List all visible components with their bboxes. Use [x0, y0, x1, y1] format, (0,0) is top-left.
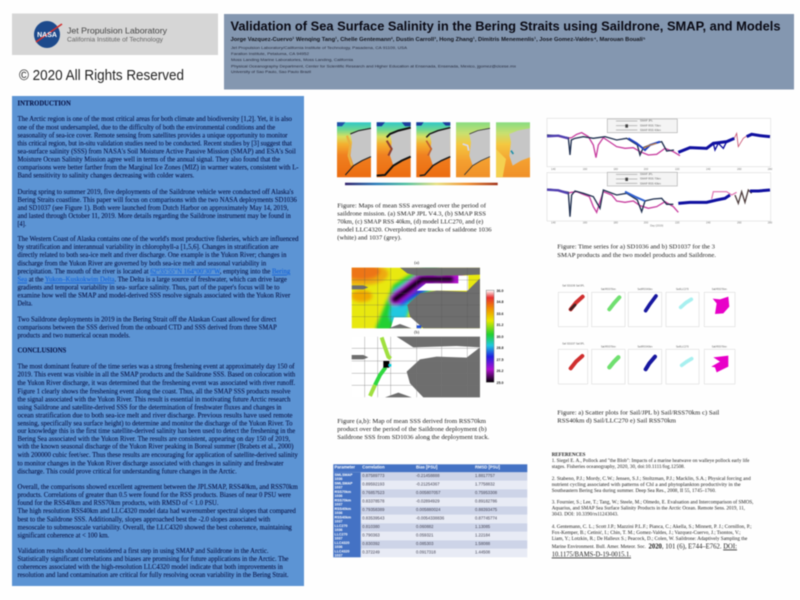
table header row: Parameter: [334, 464, 355, 470]
table values: 0.89592193: [362, 482, 385, 486]
table values: 0.87745774: [475, 516, 498, 520]
paragraph: validation results: coherences associated with the high-resolution LLC4320 model indicate that both improvements in: [18, 562, 283, 571]
panel titles: Sail/RSS70km: [712, 289, 727, 291]
Caltech line: California Institute of Technology: [67, 36, 164, 44]
legend box: SMAP RSS 70km: [640, 177, 662, 181]
paragraph: western coast: precipitation. The mouth of the river is located at 62°35′55″N 164°00′30″W, emptying into the Bering: [18, 267, 290, 276]
paragraph: Arctic region: seasonality of sea-ice cover. Remote sensing from satellites provides a unique opportunity to monitor: [18, 130, 288, 139]
x axis ticks: 260: [737, 221, 742, 225]
references: [552, 452, 754, 558]
paragraph: deployments: Bering Straits coastline. This paper will focus on comparisons with the two NASA deployments SD1036: [18, 195, 297, 204]
paragraph: freshening event: the signal associated with the Yukon River. This result is essential in motivating future Arctic research: [18, 394, 291, 403]
panel titles: Sail/RSS40km: [637, 347, 653, 349]
x axis ticks: 160: [583, 167, 588, 171]
label (a): (a): [414, 260, 420, 265]
table first column: 1036: [334, 494, 342, 498]
map c: SMAP RSS 40km: [416, 122, 450, 177]
legend: SSS colorbar: 31.2: [496, 323, 504, 327]
paragraph: freshening event: with 200000 cubic feet/sec. Thus these results are encouraging for application of satellite-derived salinity: [18, 450, 298, 459]
paragraph: deployments: During spring to summer 2019, five deployments of the Saildrone vehicle were conducted off Alaska's: [18, 187, 294, 196]
table first column: RSS40km: [334, 507, 351, 511]
reference 4: 2020, 101 (6), E744–E762. DOI:: [648, 542, 737, 550]
paragraph: Arctic region: [18, 114, 299, 180]
legend: SSS colorbar: 36.0: [496, 289, 504, 293]
x axis ticks: 220: [675, 167, 680, 171]
table values: -0.21254367: [416, 482, 440, 486]
heading: introduction: INTRODUCTION: [18, 98, 71, 107]
table values: 1.22184: [475, 532, 491, 538]
map e: LLC4320: [496, 122, 530, 177]
x axis ticks: [551, 221, 773, 228]
paragraph: deployments: and lasted through October 11, 2019. More details regarding the Saildrone instrument may be found in: [18, 211, 291, 220]
legend box: SMAP RSS 40km: [640, 181, 662, 185]
legend: SSS colorbar: [486, 289, 504, 385]
legend: SSS colorbar: 30.0: [496, 335, 504, 339]
map a: SMAP JPL: [337, 122, 371, 177]
x axis ticks: 240: [706, 221, 711, 225]
caption: RSS70km map: product over the period of the Saildrone deployment (b): [337, 426, 487, 433]
paragraph: direct comparisons: [18, 314, 277, 339]
chart: Saildrone track map (b): [352, 329, 480, 397]
paragraph: freshening event: using Saildrone and satellite-derived SSS for the determination of freshwater fluxes and changes in: [18, 402, 282, 411]
paragraph: western coast: gradients and temporal variability in sea- surface salinity. Thus, part of the paper's focus will be to: [18, 282, 280, 291]
x axis ticks: 180: [613, 167, 618, 171]
caption: RSS70km map: Figure (a,b): Map of mean SSS derived from RSS70km: [337, 418, 487, 425]
affiliations: Moss Landing Marine Laboratories, Moss Landing, California: [231, 58, 353, 62]
table values: 0.085303: [416, 541, 434, 546]
caption: maps of mean SSS: [337, 202, 492, 242]
table values: 0.75953308: [475, 490, 498, 495]
table first column: LLC4320: [334, 549, 349, 553]
affiliations: [231, 46, 516, 74]
paragraph: western coast: by stratification and interannual variability in chlorophyll-a [1,5,6]. Changes in stratification are: [18, 242, 279, 251]
chart: scatter plots row SD1037: [558, 344, 735, 384]
table values: 0.810380: [362, 524, 380, 529]
caption: RSS70km map: [337, 418, 490, 441]
table values: 0.87589773: [362, 473, 385, 478]
paragraph: western coast: discharge from the Yukon River are governed by both sea-ice melt and seasonal variability in: [18, 258, 266, 267]
reference 4: Liam, Y.; Lotzkin, R.; De Halleux S.; Peacock, D.; Colen, W. Saildrone: Adaptively Sampling the: [552, 536, 748, 542]
reference 2: nutrient cycling associated with patterns of Chl a and phytoplankton productivity in the: [552, 481, 741, 488]
caption: maps of mean SSS: saildrone mission. (a) SMAP JPL V4.3, (b) SMAP RSS: [337, 210, 486, 217]
x axis ticks: 200: [644, 167, 649, 171]
table first column: 1037: [334, 536, 342, 540]
reference 1: [552, 457, 750, 470]
table values: 0.372249: [362, 550, 380, 554]
reference 4: Fox-Kemper, B.; Cetinić, I.; Chin, T. M.; Gomez-Valdes, J.; Vazquez-Cuervo, J.; Tsontos, V.;: [552, 530, 741, 536]
legend: SSS colorbar: 33.6: [496, 312, 504, 316]
legend: SSS colorbar: 28.8: [496, 346, 504, 350]
reference 3: Aquarius, and SMAP Sea Surface Salinity Products in the Arctic Ocean. Remote Sens. 2019, 11,: [552, 505, 746, 512]
paragraph: freshening event: [18, 362, 298, 475]
references heading: REFERENCES: [552, 452, 585, 458]
table values: 1.44508: [475, 550, 491, 554]
paragraph: freshening event: Figure 1 clearly shows the freshening event along the coast. Thus, all the SMAP SSS products resolve: [18, 386, 291, 395]
panel titles: Sail/RSS70km: [601, 347, 616, 349]
JPL name: Jet Propulsion Laboratory: [67, 26, 168, 36]
caption: maps of mean SSS: 70km, (c) SMAP RSS 40km, (d) model LLC270, and (e): [337, 219, 483, 226]
panel titles: Sail/LLC270: [676, 289, 689, 291]
reference 4: 10.1175/BAMS-D-19-0015.1.: [552, 550, 631, 558]
paragraph: freshening event: the Yukon River discharge, it was determined that the freshening event was associated with river runoff.: [18, 378, 295, 387]
table header row: Correlation: [362, 464, 385, 470]
authors: Jorge Vazquez-Cuervo¹ Wenqing Tang¹, Chelle Gentemann², Dustin Carroll³, Hong Zhang¹, Dimitris Menemenlis¹, Jose Gomez-Valdes⁴, Marouan Bouali⁵: [230, 36, 646, 43]
x axis ticks: 180: [613, 221, 618, 225]
panel titles: [562, 344, 727, 349]
legend: SSS colorbar: 27.5: [496, 358, 504, 362]
chart: five SSS maps: [337, 122, 530, 185]
table values: 0.0917318: [416, 550, 436, 554]
x axis ticks: 220: [675, 221, 680, 225]
map d: LLC270: [456, 122, 490, 177]
table first column: 1036: [334, 511, 342, 515]
table first column: [334, 473, 353, 558]
chart: scatter plots row SD1036: [558, 286, 735, 327]
x axis ticks: [551, 167, 773, 171]
table values: 0.830392: [362, 541, 380, 546]
panel titles: Sail/RSS70km: [601, 289, 616, 291]
chart: RSS70km mean SSS map (a): [350, 260, 481, 330]
table first column: SMLSMAP: [334, 481, 353, 485]
icon: NASA meatball: NASA: [37, 32, 57, 39]
table first column: 1036: [334, 477, 342, 481]
table values: 0.76857523: [362, 490, 385, 495]
panel titles: Sail SD1037 Sail/JPL: [562, 344, 585, 346]
table first column: LLC270: [334, 524, 347, 528]
panel titles: [562, 286, 727, 291]
paragraph: direct comparisons: Two Saildrone deployments in 2019 in the Bering Strait off the Alaskan Coast allowed for direct: [18, 314, 277, 323]
paragraph: comparisons overall: Overall, the comparisons showed excellent agreement between the JPLSMAP, RSS40km, and RSS70km: [18, 482, 298, 491]
table first column: LLC270: [334, 532, 347, 536]
paragraph: Arctic region: comparisons were better farther from the Marginal Ice Zones (MIZ) in warmer waters, consistent with L-: [18, 163, 299, 172]
paragraph: freshening event: to monitor changes in the Yukon River discharge associated with changes in salinity and freshwater: [18, 458, 284, 467]
chart: time series SD1036: [547, 118, 773, 171]
caption: scatter plots: Figure: a) Scatter plots for Sail/JPL b) Sail/RSS70km c) Sail: [557, 410, 719, 417]
paragraph: freshening event: with the known seasonal discharge of the Yukon River peaking in Boreal summer (Brabets et al., 2000): [18, 442, 294, 451]
heading: conclusions: CONCLUSIONS: [18, 346, 66, 355]
x axis ticks: 260: [737, 167, 742, 171]
table values: 0.79358389: [362, 507, 385, 512]
panel titles: Sail/LLC270: [676, 347, 689, 349]
caption: maps of mean SSS: (white) and 1037 (grey).: [337, 235, 402, 242]
table first column: LLC4320: [334, 541, 349, 545]
legend box: SMAP JPL: [640, 172, 653, 176]
panel titles: Sail SD1036 Sail/JPL: [562, 286, 585, 288]
table values: 1.58088: [475, 541, 491, 546]
paragraph: comparisons overall: best to the Saildrone SSS. Additionally, slopes approached best the -2.0 slopes associated with: [18, 514, 270, 523]
reference 1: stages. Fisheries oceanography, 2020, 30, doi:10.1111/fog.12508.: [552, 463, 685, 470]
reference 2: 2. Stabeno, P.J.; Mordy, C.W.; Jensen, S.J.; Stoltzman, P.J.; Macklin, S.A.; Physical forcing and: [552, 475, 751, 482]
paragraph: comparisons overall: found for the RSS40km and RSS70km products, with RMSD of < 1.0 PSU.: [18, 498, 219, 507]
caption: scatter plots: [557, 410, 719, 425]
x axis ticks: 240: [706, 167, 711, 171]
table first column: 1036: [334, 528, 342, 532]
affiliations: University of Sao Paulo, Sao Paulo Brazil: [231, 70, 311, 74]
paragraph: Arctic region: Moisture Ocean Salinity Mission agree well in terms of the annual signal. They also found that the: [18, 155, 281, 164]
panel titles: Sail/RSS40km: [637, 289, 653, 291]
x axis ticks: 140: [551, 221, 556, 225]
table values: 0.88393475: [475, 507, 498, 512]
table values: 0.83539543: [362, 516, 385, 520]
paragraph: freshening event: Bering Sea associated with the Yukon River. The results are consistent, appearing on day 150 of 2019,: [18, 434, 290, 443]
reference 3: 3. Fournier, S.; Lee, T.; Tang, W.; Steele, M.; Olmedo, E. Evaluation and Intercomparison of SMOS,: [552, 499, 754, 506]
map b: SMAP RSS 70km: [377, 122, 411, 177]
paragraph: freshening event: The most dominant feature of the time series was a strong freshening event at approximately day 150 of: [18, 362, 295, 371]
paragraph: western coast: examine how well the SMAP and model-derived SSS resolve signals associated with the Yukon River: [18, 290, 291, 299]
paragraph: comparisons overall: [18, 482, 298, 540]
table values: 1.7758832: [475, 482, 495, 486]
table values: 0.005880024: [416, 507, 441, 512]
affiliations: Farallon Institute, Petaluma, CA 94952: [231, 52, 309, 56]
table values: 0.89182786: [475, 498, 498, 504]
caption: maps of mean SSS: Figure: Maps of mean SSS averaged over the period of: [337, 202, 487, 209]
JPL logo panel: [12, 14, 218, 55]
table first column: RSS70km: [334, 498, 351, 502]
table values: 0.060882: [416, 524, 434, 529]
legend box: [607, 172, 677, 186]
paragraph: Arctic region: sea-surface salinity (SSS) from NASA's Soil Moisture Active Passive Mission (SMAP) and ESA's Soil: [18, 146, 296, 155]
paragraph: direct comparisons: products and two numerical ocean models.: [18, 330, 130, 339]
caption: time series: Figure: Time series for a) SD1036 and b) SD1037 for the 3: [557, 244, 716, 251]
paragraph: comparisons overall: The high resolution RSS40km and LLC4320 model data had wavenumber spectral slopes that compared: [18, 506, 296, 515]
table header row: [334, 464, 500, 470]
x axis ticks: 200: [644, 221, 649, 225]
icon: NASA meatball: [34, 21, 62, 48]
paragraph: deployments: [4].: [18, 219, 26, 228]
table values: 0.790363: [362, 532, 380, 538]
table values: -0.21458888: [416, 473, 440, 478]
reference 3: [552, 499, 754, 518]
table header row: RMSD [PSU]: [475, 464, 500, 470]
table values: -0.0054338836: [416, 516, 445, 520]
table: statistics: [333, 464, 527, 558]
table first column: 1037: [334, 520, 342, 524]
table values: [362, 473, 498, 554]
map colorbar: [345, 183, 498, 185]
title: Validation of Sea Surface Salinity in the Bering Straits using Saildrone, SMAP, and Models: [230, 18, 780, 34]
table values: -0.02894929: [416, 498, 440, 504]
legend: SSS colorbar: 34.8: [496, 300, 504, 304]
reference 4: [552, 524, 752, 558]
paragraph: western coast: Sea at the Yukon–Kuskokwim Delta. The Delta is a large source of freshwater, which can drive large: [18, 275, 287, 284]
paragraph: western coast: Delta.: [18, 298, 33, 307]
table header row: Bias [PSU]: [416, 464, 438, 470]
caption: scatter plots: RSS40km d) Sail/LLC270 e) Sail RSS70km: [557, 418, 677, 425]
paragraph: freshening event: discharge. This could prove critical for understanding future changes in the Arctic.: [18, 466, 237, 475]
paragraph: validation results: Statistically significant correlations and biases are promising for future applications in the Arctic. The: [18, 554, 289, 563]
legend: SSS colorbar: 25.0: [496, 381, 504, 385]
paragraph: freshening event: sensing, specifically sea surface height) to determine and monitor the discharge of the Yukon River. To: [18, 418, 293, 427]
paragraph: validation results: resolution and land contamination are critical for fully resolving ocean variability in the Bering Strait.: [18, 570, 289, 579]
legend box: SMAP RSS 40km: [640, 128, 662, 132]
panel titles: Sail/RSS70km: [712, 347, 727, 349]
paragraph: validation results: Validation results should be considered a first step in using SMAP and Saildrone in the Arctic.: [18, 546, 269, 555]
legend box: SMAP RSS 70km: [640, 123, 662, 127]
caption: time series: SMAP products and the two model products and Saildrone.: [557, 252, 716, 259]
x axis ticks: 140: [551, 167, 556, 171]
table first column: SMLSMAP: [334, 473, 353, 477]
reference 2: Southeastern Bering Sea during summer. Deep Sea Res., 2008, II 55, 1745–1760.: [552, 488, 716, 494]
paragraph: freshening event: 2019. This event was visible in all the SMAP products and the Saildrone SSS. Based on colocation with: [18, 370, 295, 379]
paragraph: western coast: [18, 234, 299, 307]
copyright notice: © 2020 All Rights Reserved: [19, 68, 184, 84]
paragraph: freshening event: ocean stratification due to both sea-ice melt and river discharge. Previous results have used remote: [18, 410, 293, 419]
paragraph: validation results: [18, 546, 289, 579]
table first column: RSS40km: [334, 515, 351, 519]
caption: maps of mean SSS: model LLC4320. Overplotted are tracks of saildrone 1036: [337, 227, 492, 234]
paragraph: comparisons overall: significant coherence at < 100 km.: [18, 531, 109, 540]
caption: RSS70km map: Saildrone SSS from SD1036 along the deployment track.: [337, 434, 490, 441]
table first column: 1037: [334, 486, 342, 490]
chart: time series SD1037: [547, 172, 773, 228]
reference 1: 1. Siegel E. A., Pollock and "the Blob": Impacts of a marine heatwave on walleye pollock early life: [552, 457, 750, 464]
table first column: 1037: [334, 554, 342, 558]
x axis ticks: 160: [583, 221, 588, 225]
x axis ticks: 280: [768, 221, 773, 225]
paragraph: deployments: [18, 187, 297, 228]
paragraph: Arctic region: The Arctic region is one of the most critical areas for both climate and biodiversity [1,2]. Yet, it is also: [18, 114, 292, 123]
table values: 1.8817757: [475, 473, 495, 478]
table values: 0.005807057: [416, 490, 441, 495]
paragraph: western coast: The Western Coast of Alaska contains one of the world's most productive fisheries, which are influenced: [18, 234, 299, 243]
table first column: 1036: [334, 545, 342, 549]
paragraph: comparisons overall: products. Correlations of greater than 0.5 were found for the RSS products. Biases of near 0 PSU were: [18, 490, 291, 499]
legend: SSS colorbar: 26.2: [496, 369, 504, 373]
legend box: [607, 119, 677, 133]
affiliations: Jet Propulsion Laboratory/California Institute of Technology, Pasadena, CA 91109, USA: [231, 46, 408, 50]
title panel: [224, 14, 794, 90]
table first column: RSS70km: [334, 490, 351, 494]
paragraph: freshening event: our knowledge this is the first time satellite-derived salinity has been used to detect the freshening in the: [18, 426, 296, 435]
label (b): (b): [414, 329, 420, 334]
reference 2: [552, 475, 751, 494]
paragraph: western coast: directly related to both sea-ice melt and river discharge. One example is the Yukon River; changes in: [18, 250, 287, 259]
reference 4: Marine Environment. Bull. Amer. Meteor. Soc.: [552, 544, 646, 550]
paragraph: Arctic region: one of the most undersampled, due to the difficulty of both the environmental conditions and the: [18, 122, 276, 131]
caption: time series: [557, 244, 716, 259]
paragraph: deployments: and SD1037 (see Figure 1). Both were launched from Dutch Harbor on approximately May 14, 2019,: [18, 203, 289, 212]
x axis ticks: 280: [768, 167, 773, 171]
paragraph: Arctic region: Band sensitivity to salinity changes decreasing with colder waters.: [18, 171, 194, 180]
affiliations: Physical Oceanography Department, Center for Scientific Research and Higher Education at Ensenada, Ensenada, Mexico, jgomez@cicese.mx: [231, 64, 516, 68]
panel: introduction and conclusions: [12, 96, 304, 586]
table values: 1.13085: [475, 524, 491, 529]
paragraph: direct comparisons: comparisons between the SSS derived from the onboard CTD and SSS derived from three SMAP: [18, 322, 277, 331]
reference 4: 4. Gentemann, C. L.; Scott J.P.; Mazzini P.L.F.; Pianca, C.; Akella, S.; Minnett, P. J.; Cornillon, P.;: [552, 524, 752, 530]
x axis ticks: Day (2019): [650, 224, 663, 228]
paragraph: comparisons overall: mesoscale to submesoscale variability. Overall, the LLC4320 showed the best coherence, maintaining: [18, 523, 292, 532]
table values: 0.83378578: [362, 498, 385, 504]
legend box: SMAP JPL: [640, 119, 653, 123]
table first column: 1037: [334, 502, 342, 506]
reference 3: 3043. DOI: 10.3390/rs11243043.: [552, 512, 618, 518]
paragraph: Arctic region: this critical region, but in-situ validation studies need to be conducted. Recent studies by [3] suggest that: [18, 138, 293, 147]
table values: 0.059321: [416, 532, 434, 538]
